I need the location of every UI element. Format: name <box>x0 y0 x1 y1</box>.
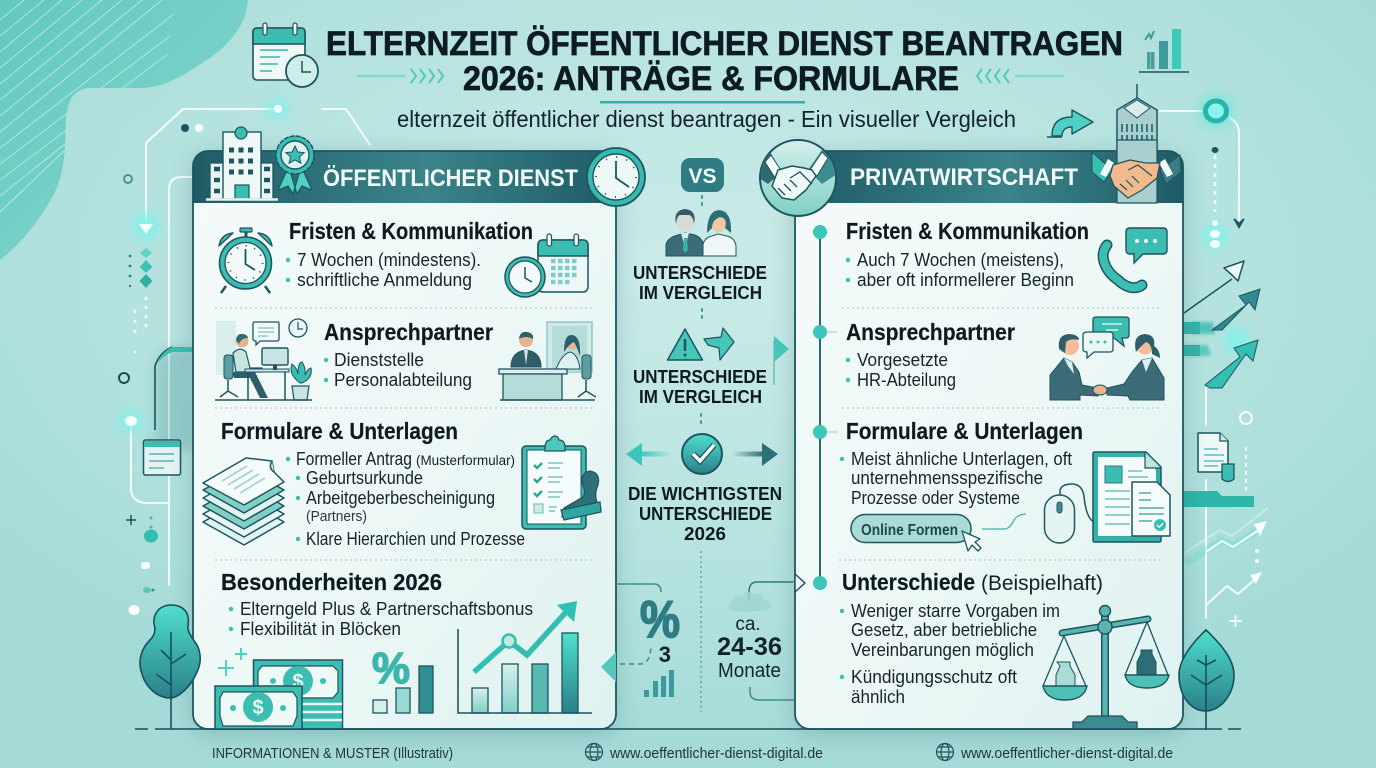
label: Unterschiede im Vergleich 2 <box>633 367 767 407</box>
icon: curved arrow <box>1047 110 1093 137</box>
section: Formulare und Unterlagen: (Musterformular) <box>416 452 515 468</box>
button: Online Formen <box>851 514 1026 551</box>
icon: handshake medallion <box>756 140 840 216</box>
section: Ansprechpartner: Dienststelle <box>334 349 424 370</box>
section: Besonderheiten 2026 <box>215 569 592 730</box>
footer <box>212 744 1173 762</box>
icon: paper stack <box>203 458 284 545</box>
section: Unterschiede Beispielhaft <box>840 569 1169 729</box>
section: Formulare und Unterlagen: unternehmensspezifische <box>851 467 1043 488</box>
section: Unterschiede Beispielhaft: Gesetz, aber betriebliche <box>851 619 1037 640</box>
ground line <box>135 728 1241 730</box>
arrows rising at right <box>1184 261 1260 388</box>
footer: www.oeffentlicher-dienst-digital.de <box>960 745 1173 762</box>
icon: calendar with clock <box>505 234 588 297</box>
section: Ansprechpartner: Vorgesetzte <box>857 349 948 370</box>
section: Ansprechpartner: Ansprechpartner <box>324 319 493 345</box>
icon: warning triangle and arrow <box>668 328 734 360</box>
section: Formulare und Unterlagen <box>203 418 601 549</box>
callout: 24-36 Monate: Monate <box>718 660 781 682</box>
icon: balance scales <box>1043 606 1169 729</box>
section: Fristen und Kommunikation: aber oft informellerer Beginn <box>857 269 1074 290</box>
illustration: counter meeting <box>499 322 596 400</box>
panel background <box>795 151 1183 729</box>
callout: percent: % <box>640 591 680 649</box>
button: Online Formen: Online Formen <box>861 522 958 539</box>
chart: rising bar chart <box>458 601 592 713</box>
timeline <box>813 225 837 590</box>
panel: Öffentlicher Dienst <box>193 127 616 733</box>
illustration: employee at desk <box>215 319 312 400</box>
label: Die wichtigsten Unterschiede 2026 <box>628 484 782 544</box>
badge: VS: VS <box>688 165 717 188</box>
section: Fristen und Kommunikation: schriftliche Anmeldung <box>297 269 472 290</box>
section: Fristen und Kommunikation: 7 Wochen (mindestens). <box>297 249 481 270</box>
icon: phone with chat bubble <box>1103 228 1167 288</box>
section: Ansprechpartner: Ansprechpartner <box>846 319 1015 345</box>
label: Die wichtigsten Unterschiede 2026: DIE WICHTIGSTEN <box>628 484 782 504</box>
icon: bar chart top right <box>1139 29 1189 72</box>
label: Unterschiede im Vergleich 2: IM VERGLEICH <box>639 387 762 407</box>
section: Unterschiede Beispielhaft: Kündigungsschutz oft <box>851 666 1017 687</box>
section: Formulare und Unterlagen: Meist ähnliche Unterlagen, oft <box>851 448 1072 469</box>
panel background <box>193 151 616 729</box>
icon: tower base with handshake <box>1092 140 1181 203</box>
right document and trend decorations <box>1184 388 1268 627</box>
marker: chevron flag <box>774 336 789 385</box>
section: Unterschiede Beispielhaft: Vereinbarungen möglich <box>851 639 1034 660</box>
section: Unterschiede Beispielhaft: (Beispielhaft) <box>981 572 1103 595</box>
badge: VS <box>681 158 724 192</box>
icon: leaf tree right <box>1179 630 1234 730</box>
left circuit decorations <box>119 99 370 615</box>
main title <box>326 25 1123 98</box>
icon: wall clock on panel corner <box>587 148 645 206</box>
section: Unterschiede Beispielhaft: Weniger starre Vorgaben im <box>851 600 1060 621</box>
title underline <box>600 101 805 104</box>
callout: percent: 3 <box>659 642 671 667</box>
footer: www.oeffentlicher-dienst-digital.de <box>609 745 823 762</box>
section: Formulare und Unterlagen: Formulare & Unterlagen <box>221 418 458 444</box>
section: Formulare und Unterlagen: (Partners) <box>306 509 367 525</box>
connector: panel left notch <box>601 652 616 682</box>
section: Ansprechpartner <box>846 317 1164 400</box>
section: Ansprechpartner: HR-Abteilung <box>857 369 956 390</box>
section: Fristen und Kommunikation <box>219 218 588 297</box>
right circuit decorations <box>1160 94 1244 249</box>
icon: alarm clock <box>219 228 272 293</box>
label: Unterschiede im Vergleich 1: IM VERGLEICH <box>639 283 762 303</box>
section: Besonderheiten 2026: Besonderheiten 2026 <box>221 569 442 595</box>
icon: two people <box>666 209 736 256</box>
callout: 24-36 Monate <box>717 582 795 700</box>
footer: INFORMATIONEN & MUSTER (Illustrativ) <box>212 746 453 762</box>
subtitle: elternzeit öffentlicher dienst beantragen - Ein visueller Vergleich <box>397 106 1016 132</box>
section: Formulare und Unterlagen <box>840 418 1170 551</box>
connector: right panel notch <box>795 574 805 592</box>
title decor icon: calendar with clock <box>253 23 318 87</box>
callout: percent <box>616 584 680 697</box>
section: Fristen und Kommunikation: Fristen & Kommunikation <box>846 218 1089 244</box>
section: Fristen und Kommunikation: Fristen & Kommunikation <box>289 218 533 244</box>
label: Die wichtigsten Unterschiede 2026: 2026 <box>684 524 726 544</box>
section: Besonderheiten 2026: Flexibilität in Blöcken <box>240 618 401 639</box>
main title: ELTERNZEIT ÖFFENTLICHER DIENST BEANTRAGEN <box>326 25 1123 63</box>
icon: tree left <box>140 605 200 729</box>
main title: 2026: ANTRÄGE & FORMULARE <box>463 60 959 98</box>
section: Fristen und Kommunikation <box>846 218 1167 290</box>
section: Fristen und Kommunikation: Auch 7 Wochen (meistens), <box>857 249 1064 270</box>
icon: globe <box>586 744 602 760</box>
section: Formulare und Unterlagen: Formulare & Unterlagen <box>846 418 1083 444</box>
panel header band <box>795 151 1183 203</box>
callout: 24-36 Monate: 24-36 <box>717 633 782 661</box>
section: Ansprechpartner: Personalabteilung <box>334 369 472 390</box>
icon: clipboard with stamp <box>522 436 601 529</box>
panel: Privatwirtschaft <box>795 140 1183 733</box>
icon: globe <box>936 744 954 760</box>
label: Unterschiede im Vergleich 1: UNTERSCHIEDE <box>633 263 767 283</box>
section: Formulare und Unterlagen: Geburtsurkunde <box>306 467 423 488</box>
panel heading: PRIVATWIRTSCHAFT <box>850 164 1078 191</box>
callout: 24-36 Monate: ca. <box>735 614 761 635</box>
section: Formulare und Unterlagen: Arbeitgeberbescheinigung <box>306 487 495 508</box>
label: Unterschiede im Vergleich 1 <box>633 263 767 303</box>
icon: percent with small bars <box>372 644 433 713</box>
panel heading: ÖFFENTLICHER DIENST <box>323 165 578 192</box>
icon: office tower <box>1117 84 1157 204</box>
icon: check with two arrows <box>626 434 778 474</box>
section: Formulare und Unterlagen: Formeller Antrag <box>296 448 412 469</box>
section: Formulare und Unterlagen: Klare Hierarchien und Prozesse <box>306 528 525 549</box>
icon: money notes: $ <box>252 697 264 719</box>
icon: mouse and documents <box>1044 452 1170 543</box>
label: Unterschiede im Vergleich 2: UNTERSCHIEDE <box>633 367 767 387</box>
icon: money notes <box>215 648 342 730</box>
section: Besonderheiten 2026: Elterngeld Plus & Partnerschaftsbonus <box>240 598 533 619</box>
illustration: business handshake <box>1050 317 1164 400</box>
label: Die wichtigsten Unterschiede 2026: UNTERSCHIEDE <box>639 504 772 524</box>
section: Formulare und Unterlagen: Prozesse oder Systeme <box>851 487 1020 508</box>
section: Unterschiede Beispielhaft: ähnlich <box>851 686 905 707</box>
section: Unterschiede Beispielhaft: Unterschiede <box>842 569 975 595</box>
icon: money notes: $ <box>292 671 304 693</box>
section: Ansprechpartner <box>215 319 596 400</box>
icon: award ribbon <box>276 136 314 194</box>
panel header band <box>193 151 616 203</box>
decorative corner blob <box>0 0 248 260</box>
title chevrons <box>357 69 1064 83</box>
icon: percent with small bars: % <box>372 644 410 693</box>
icon: government building <box>206 127 278 200</box>
